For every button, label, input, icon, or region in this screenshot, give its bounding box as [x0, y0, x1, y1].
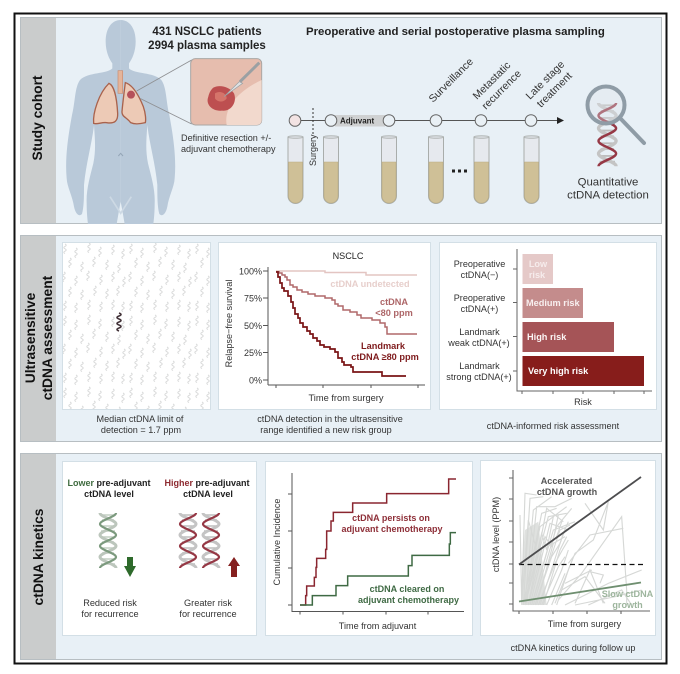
chart: risk bars: High risk [527, 332, 567, 342]
timeline [289, 56, 575, 166]
chart: relapse-free survival: 0% [249, 376, 262, 386]
chart: limit of detection field [62, 242, 210, 410]
chart: relapse-free survival: Landmark [361, 341, 406, 351]
chart: risk bars: Preoperative [454, 293, 505, 303]
text: resection: Definitive resection +/- [181, 133, 271, 143]
chart: cumulative incidence: Time from adjuvant [339, 621, 417, 631]
chart: relapse-free survival: Relapse−free survival [224, 280, 234, 367]
chart: risk bars [440, 242, 656, 410]
chart: risk bars: ctDNA(−) [461, 270, 498, 280]
timeline: Surveillance [427, 56, 476, 105]
chart: ctDNA level trajectories: Time from surgery [548, 619, 622, 629]
chart: risk bars: Risk [574, 397, 592, 407]
chart: relapse-free survival: ctDNA undetected [330, 279, 410, 289]
chart: ctDNA level trajectories [480, 460, 656, 636]
chart: relapse-free survival: NSCLC [333, 251, 364, 261]
plasma tubes [288, 136, 539, 204]
chart: relapse-free survival: 50% [244, 321, 262, 331]
panel: pre-adjuvant level: Lower pre-adjuvant [67, 478, 151, 488]
chart: risk bars: ctDNA(+) [461, 304, 498, 314]
heading: study cohort: Study cohort [30, 75, 45, 161]
chart: relapse-free survival: <80 ppm [375, 308, 413, 318]
chart: risk bars: Low [529, 259, 548, 269]
chart: cumulative incidence: ctDNA persists on [352, 513, 430, 523]
panel: pre-adjuvant level: for recurrence [179, 609, 237, 619]
chart: cumulative incidence: Cumulative Incidence [272, 499, 282, 585]
chart: cumulative incidence: adjuvant chemotherapy [341, 524, 443, 534]
chart: relapse-free survival: ctDNA ≥80 ppm [351, 352, 419, 362]
chart: risk bars: strong ctDNA(+) [446, 372, 512, 382]
caption: risk assessment: ctDNA-informed risk assessment [487, 421, 620, 431]
caption: new risk group: ctDNA detection in the ultrasensitive [257, 414, 403, 424]
heading: patient counts: 431 NSCLC patients [152, 26, 262, 38]
heading: ultrasensitive: ctDNA assessment [40, 275, 55, 400]
chart: relapse-free survival: ctDNA [380, 297, 408, 307]
panel: pre-adjuvant level: Reduced risk [83, 598, 137, 608]
chart: relapse-free survival: Time from surgery [308, 393, 384, 403]
chart: risk bars: Landmark [459, 361, 500, 371]
timeline: Metastatic [471, 59, 514, 102]
chart: relapse-free survival [218, 242, 430, 410]
panel: study cohort [20, 18, 662, 224]
chart: relapse-free survival: 25% [244, 348, 262, 358]
chart: risk bars: Very high risk [528, 366, 589, 376]
panel: pre-adjuvant level: ctDNA level [84, 489, 134, 499]
panel: pre-adjuvant level: Greater risk [184, 598, 232, 608]
chart: risk bars: risk [529, 270, 546, 280]
panel: study cohort: adjuvant chemotherapy [181, 144, 276, 154]
timeline: treatment [535, 70, 575, 110]
timeline: Adjuvant [340, 116, 375, 126]
chart: ctDNA level trajectories: Accelerated [541, 476, 592, 486]
icon: human body with lungs [66, 20, 175, 224]
callout: tumour resection [137, 59, 262, 125]
caption: limit of detection: Median ctDNA limit of [97, 414, 183, 424]
heading: sampling: Preoperative and serial postoperative plasma sampling [306, 26, 605, 38]
chart: risk bars: Medium risk [526, 298, 580, 308]
chart: ctDNA level trajectories: growth [612, 600, 643, 610]
chart: ctDNA level trajectories: Slow ctDNA [602, 589, 654, 599]
panel: pre-adjuvant level [62, 462, 256, 636]
heading: kinetics: ctDNA kinetics [31, 508, 46, 605]
panel: ctDNA kinetics [20, 454, 662, 660]
caption: kinetics follow up: ctDNA kinetics during follow up [511, 643, 635, 653]
chart: cumulative incidence [266, 462, 472, 636]
caption: limit of detection: detection = 1.7 ppm [101, 425, 181, 435]
chart: ctDNA level trajectories: ctDNA growth [537, 487, 597, 497]
timeline: recurrence [480, 68, 524, 112]
chart: risk bars: Landmark [459, 327, 500, 337]
caption: new risk group: range identified a new risk group [260, 425, 392, 435]
heading: ultrasensitive: Ultrasensitive [23, 292, 38, 383]
chart: risk bars: weak ctDNA(+) [447, 338, 510, 348]
chart: risk bars: Preoperative [454, 259, 505, 269]
timeline: Late stage [524, 59, 567, 102]
chart: relapse-free survival: 100% [239, 266, 262, 276]
panel: study cohort: ctDNA detection [567, 190, 649, 202]
chart: relapse-free survival: 75% [244, 294, 262, 304]
panel: pre-adjuvant level: for recurrence [81, 609, 139, 619]
chart: ctDNA level trajectories: ctDNA level (PPM) [491, 497, 501, 572]
timeline: Surgery [308, 134, 318, 166]
panel: pre-adjuvant level: ctDNA level [183, 489, 233, 499]
panel: study cohort: 2994 plasma samples [148, 40, 266, 52]
chart: cumulative incidence: ctDNA cleared on [370, 584, 444, 594]
text: quantitative detection: Quantitative [578, 176, 638, 188]
panel: ultrasensitive assessment [20, 236, 662, 442]
icon: magnifier over DNA [588, 86, 644, 166]
chart: cumulative incidence: adjuvant chemotherapy [358, 595, 459, 605]
panel: pre-adjuvant level: Higher pre-adjuvant [164, 478, 250, 488]
